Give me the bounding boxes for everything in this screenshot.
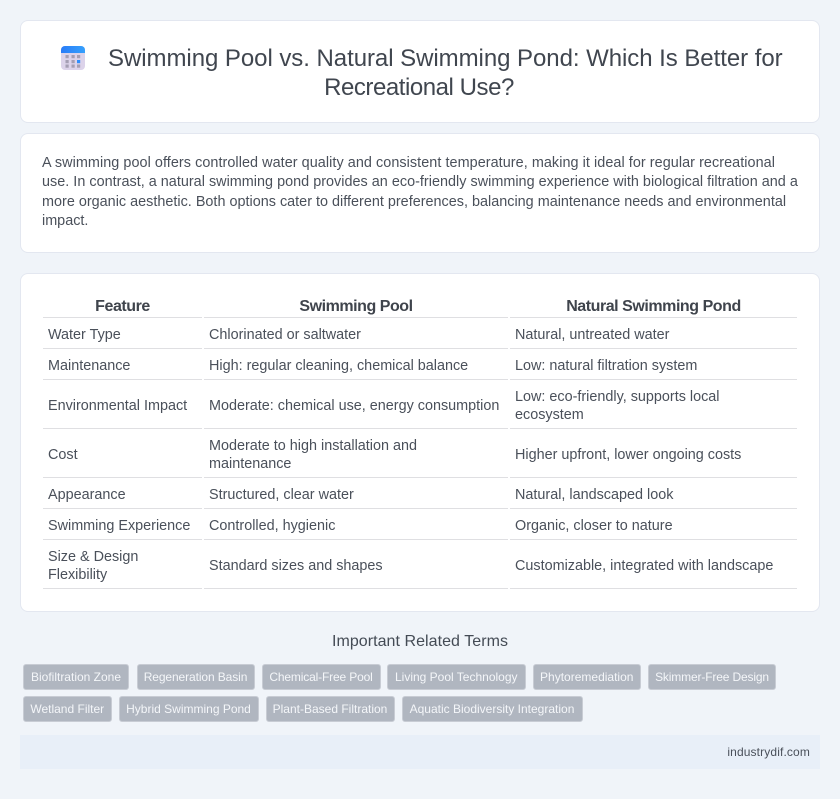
panel: comparison table [20,273,820,612]
tag: Chemical-Free Pool [269,670,373,684]
row: swimming experience: Swimming Experience [48,518,190,534]
tag [402,696,582,722]
row: cost: Moderate to high installation and [209,438,417,454]
row: maintenance: Maintenance [48,358,130,374]
intro text: A swimming pool offers controlled water quality and consistent temperature, making it ideal for regular recreational [42,155,775,171]
tag [118,696,258,722]
row: maintenance: Low: natural filtration system [515,358,697,374]
tag: Hybrid Swimming Pond [126,702,251,716]
footer source text: industrydif.com [727,745,810,759]
tag: Regeneration Basin [144,670,247,684]
row: cost: Higher upfront, lower ongoing costs [515,447,741,463]
tag: Plant-Based Filtration [273,702,387,716]
tag: Living Pool Technology [395,670,518,684]
tag: Wetland Filter [30,702,104,716]
row: environmental impact: Low: eco-friendly, supports local [515,389,720,405]
title [108,45,783,101]
tag: Skimmer-Free Design [655,670,769,684]
row: environmental impact [48,389,720,423]
tag: Phytoremediation [540,670,633,684]
row: size and design flexibility: Customizable, integrated with landscape [515,558,773,574]
row: water type [48,327,670,343]
tag: Aquatic Biodiversity Integration [410,702,574,716]
row: appearance [48,487,674,503]
row: size and design flexibility: Flexibility [48,567,107,583]
row: environmental impact: Environmental Impact [48,398,187,414]
tag: Biofiltration Zone [31,670,121,684]
tag [262,664,380,690]
row: cost: Cost [48,447,78,463]
row: swimming experience [48,518,673,534]
title: Recreational Use? [324,74,514,101]
intro text: more organic aesthetic. Both options cater to different preferences, balancing maintenance needs and environmental [42,194,786,210]
row: appearance: Structured, clear water [209,487,354,503]
related terms tags [23,664,776,722]
tag [136,664,254,690]
tag [532,664,641,690]
row: water type: Natural, untreated water [515,327,669,343]
header panel [20,20,820,123]
row: water type: Water Type [48,327,121,343]
intro text: impact. [42,213,88,229]
footer bar [20,735,820,769]
table header: Swimming Pool [299,298,413,315]
panel: introduction [20,133,820,253]
tag [23,664,129,690]
row: cost [48,438,741,472]
tag [648,664,776,690]
intro text: use. In contrast, a natural swimming pond provides an eco-friendly swimming experience with biological filtration and a [42,174,798,190]
related terms heading: Important Related Terms [332,633,508,650]
table header: Natural Swimming Pond [566,298,741,315]
tag [266,696,394,722]
row: swimming experience: Organic, closer to nature [515,518,673,534]
row: size and design flexibility: Size & Design [48,549,138,565]
row: size and design flexibility [48,549,773,583]
row: appearance: Natural, landscaped look [515,487,673,503]
row: environmental impact: ecosystem [515,407,584,423]
tag [387,664,526,690]
row: maintenance [48,358,697,374]
row: swimming experience: Controlled, hygienic [209,518,335,534]
row: appearance: Appearance [48,487,126,503]
table header [95,298,741,315]
tag [23,696,112,722]
title: Swimming Pool vs. Natural Swimming Pond: Which Is Better for [108,45,783,72]
row: cost: maintenance [209,456,291,472]
intro text [42,155,798,229]
row: size and design flexibility: Standard sizes and shapes [209,558,383,574]
row: environmental impact: Moderate: chemical use, energy consumption [209,398,499,414]
row: water type: Chlorinated or saltwater [209,327,361,343]
icon: calendar [61,46,85,70]
table header: Feature [95,298,150,315]
row: maintenance: High: regular cleaning, chemical balance [209,358,468,374]
